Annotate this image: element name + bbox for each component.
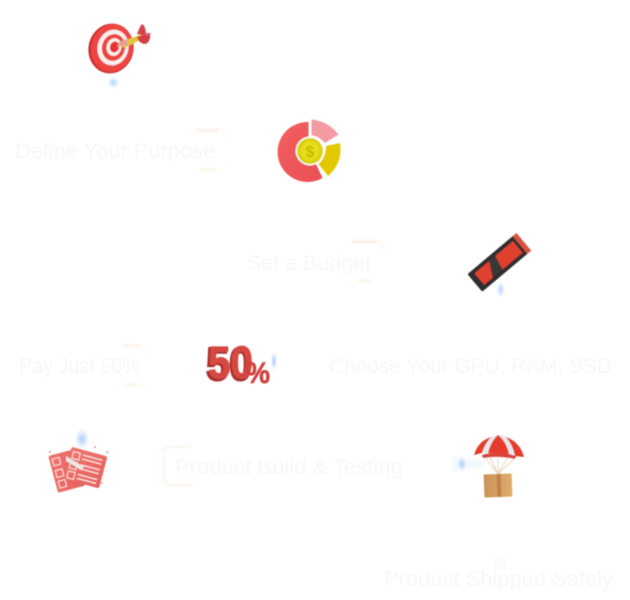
step 2 icon: budget pie chart with coin: [278, 120, 340, 182]
heading: define your purpose: Define Your Purpose: [15, 140, 215, 163]
frame: product build and testing: [163, 447, 192, 485]
step 5 icon: checklist cards: [48, 446, 110, 493]
heading: choose your GPU, RAM, SSD: Choose Your GPU, RAM, SSD: [329, 355, 612, 378]
glow: checklist: [74, 427, 90, 451]
step 4 icon: 50 percent: 50: [208, 337, 253, 388]
frame: product shipped safely: [494, 558, 506, 570]
glow: SSD: [496, 280, 505, 299]
step 3 icon: SSD component: [467, 233, 531, 292]
glow: parachute center: [456, 455, 468, 473]
glow: target: [107, 76, 120, 89]
glow: parachute: [452, 456, 484, 472]
step 6 icon: parachute with box: [474, 435, 524, 497]
heading: product shipped safely: Product Shipped Safely: [384, 568, 614, 591]
step 2 icon: budget pie chart with coin: $: [306, 144, 315, 161]
heading: pay just 50%: Pay Just 50%: [19, 355, 140, 378]
step 4 icon: 50 percent: %: [246, 357, 270, 390]
step 4 icon: 50 percent: 50: [206, 338, 252, 390]
heading: set a budget: Set a Budget: [247, 252, 371, 275]
glow: 50 percent: [270, 350, 278, 372]
step 1 icon: target with dart: [83, 19, 152, 78]
frame: define your purpose: [197, 130, 227, 170]
frame: pay just 50%: [122, 344, 147, 386]
frame: set a budget: [352, 240, 384, 282]
heading: product build and testing: Product Build & Testing: [175, 456, 403, 479]
